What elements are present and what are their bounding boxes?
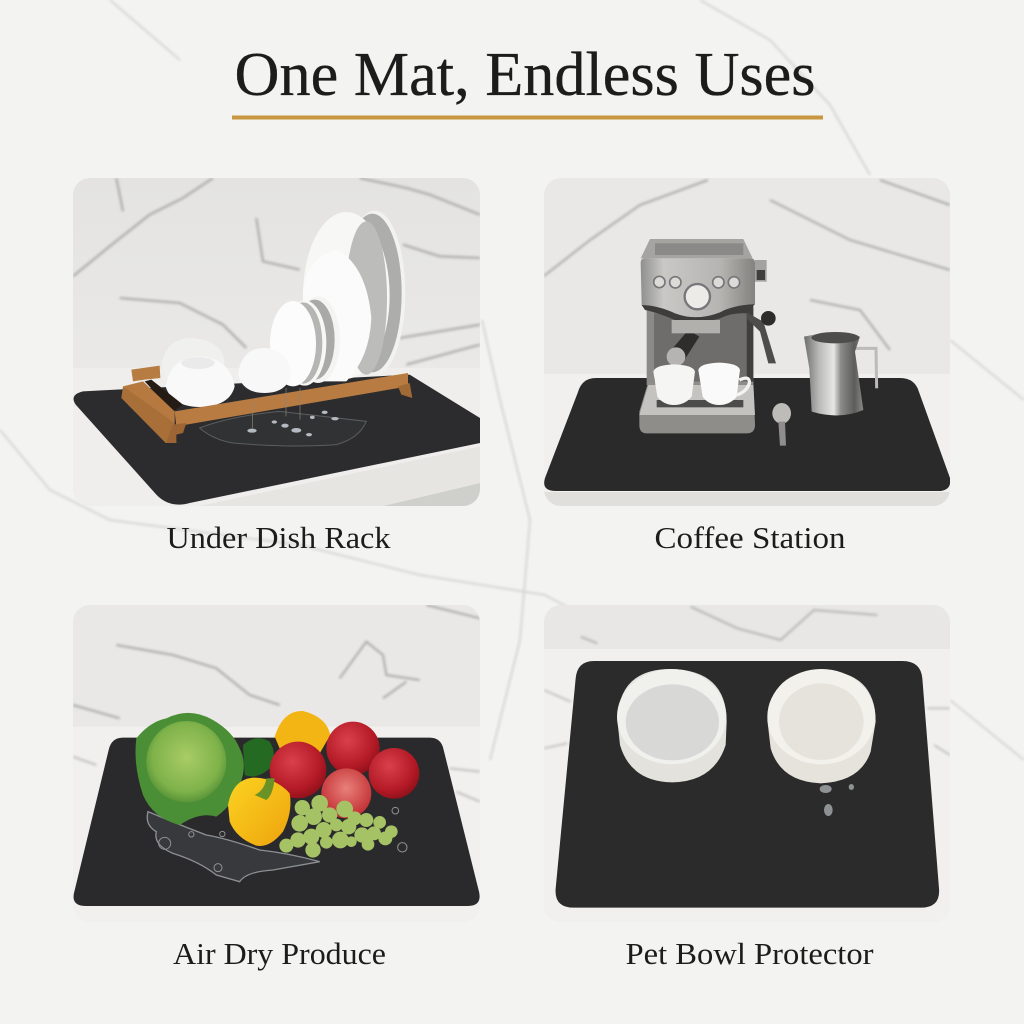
portafilter handle <box>673 333 700 359</box>
yellow pepper <box>228 778 290 846</box>
counter <box>73 368 480 506</box>
water puddle <box>147 812 320 882</box>
counter <box>73 727 480 922</box>
marble veins <box>581 607 877 643</box>
panel: under dish rack <box>73 178 480 506</box>
mat <box>74 738 480 906</box>
apple right <box>369 748 419 799</box>
right cup <box>698 363 740 405</box>
machine lid <box>641 239 753 258</box>
mat <box>74 375 480 505</box>
water drips and drops <box>247 388 339 436</box>
marble veins <box>73 178 480 365</box>
espresso machine and accessories <box>639 239 877 446</box>
water puddle <box>200 411 366 446</box>
panel: air dry produce <box>73 605 480 922</box>
gauge <box>685 284 710 309</box>
portafilter knob <box>667 347 685 366</box>
counter <box>544 374 950 506</box>
title underline <box>232 116 823 120</box>
mat <box>556 661 939 908</box>
bowl right <box>767 669 876 783</box>
water drops <box>820 784 854 816</box>
apple top <box>326 722 380 775</box>
title: One Mat, Endless Uses <box>234 41 815 109</box>
spoon bowl <box>772 403 791 424</box>
buttons <box>654 276 740 288</box>
bowls <box>161 338 291 407</box>
label: air dry produce: Air Dry Produce <box>173 936 386 971</box>
left cup <box>653 364 695 405</box>
machine body <box>641 258 755 317</box>
machine column and recess <box>647 308 753 385</box>
counter veins <box>544 690 950 755</box>
orange pepper <box>275 711 330 753</box>
steam wand <box>747 312 776 363</box>
tray top <box>639 385 755 415</box>
label: pet bowl protector: Pet Bowl Protector <box>626 936 874 971</box>
lid grille <box>655 243 743 255</box>
pepper stem <box>255 778 275 800</box>
jug handle <box>855 348 877 388</box>
marble veins <box>544 180 950 350</box>
panel: pet bowl protector <box>544 605 950 922</box>
body lower trim <box>642 304 755 320</box>
panel: coffee station <box>544 178 950 506</box>
mat <box>544 378 950 491</box>
apple low <box>321 768 371 818</box>
tray grille <box>657 400 743 407</box>
right column <box>747 305 753 383</box>
water droplets <box>159 807 407 872</box>
steam knob <box>761 311 776 326</box>
bowl left <box>617 669 727 782</box>
label: coffee station: Coffee Station <box>654 520 846 555</box>
side switch <box>755 260 767 282</box>
produce <box>135 711 419 858</box>
right cup handle <box>737 378 749 395</box>
green pepper <box>243 738 274 776</box>
lettuce <box>135 713 244 825</box>
wooden rack <box>121 366 412 443</box>
drip tray base <box>639 382 755 433</box>
plates <box>270 211 405 386</box>
marble veins <box>73 605 480 718</box>
group head <box>672 320 720 333</box>
counter veins <box>73 757 480 802</box>
jug body <box>804 333 863 415</box>
switch window <box>757 270 765 280</box>
label: under dish rack: Under Dish Rack <box>166 520 391 555</box>
counter <box>544 649 950 922</box>
recess shading <box>654 313 747 382</box>
jug opening <box>811 332 859 343</box>
grapes <box>279 795 398 858</box>
apple left <box>270 742 326 798</box>
spoon handle <box>778 422 786 446</box>
